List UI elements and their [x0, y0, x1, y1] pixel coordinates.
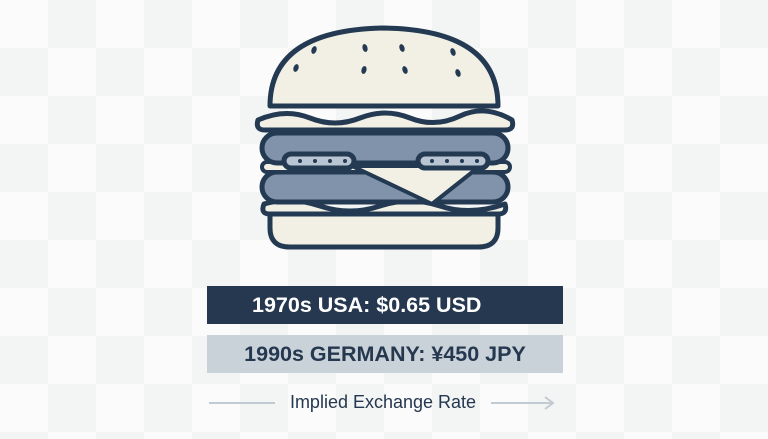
bottom bun	[270, 212, 498, 247]
bar: 1970s USA	[207, 286, 563, 324]
bar: 1990s Germany: 1990s GERMANY: ¥450 JPY	[244, 342, 526, 366]
patty 2	[262, 172, 508, 202]
bar: 1970s USA: 1970s USA: $0.65 USD	[252, 293, 481, 317]
top lettuce	[257, 111, 513, 130]
patty 1	[262, 133, 508, 163]
top bun	[270, 28, 498, 106]
arrow: implied exchange rate: Implied Exchange Rate	[290, 392, 476, 412]
middle bread strip	[262, 162, 510, 172]
arrow: implied exchange rate	[209, 392, 554, 412]
icon: burger	[254, 26, 516, 250]
grill marks	[284, 154, 354, 168]
bar: 1990s Germany	[207, 335, 563, 373]
bottom lettuce	[263, 200, 506, 214]
cheese	[352, 166, 480, 204]
